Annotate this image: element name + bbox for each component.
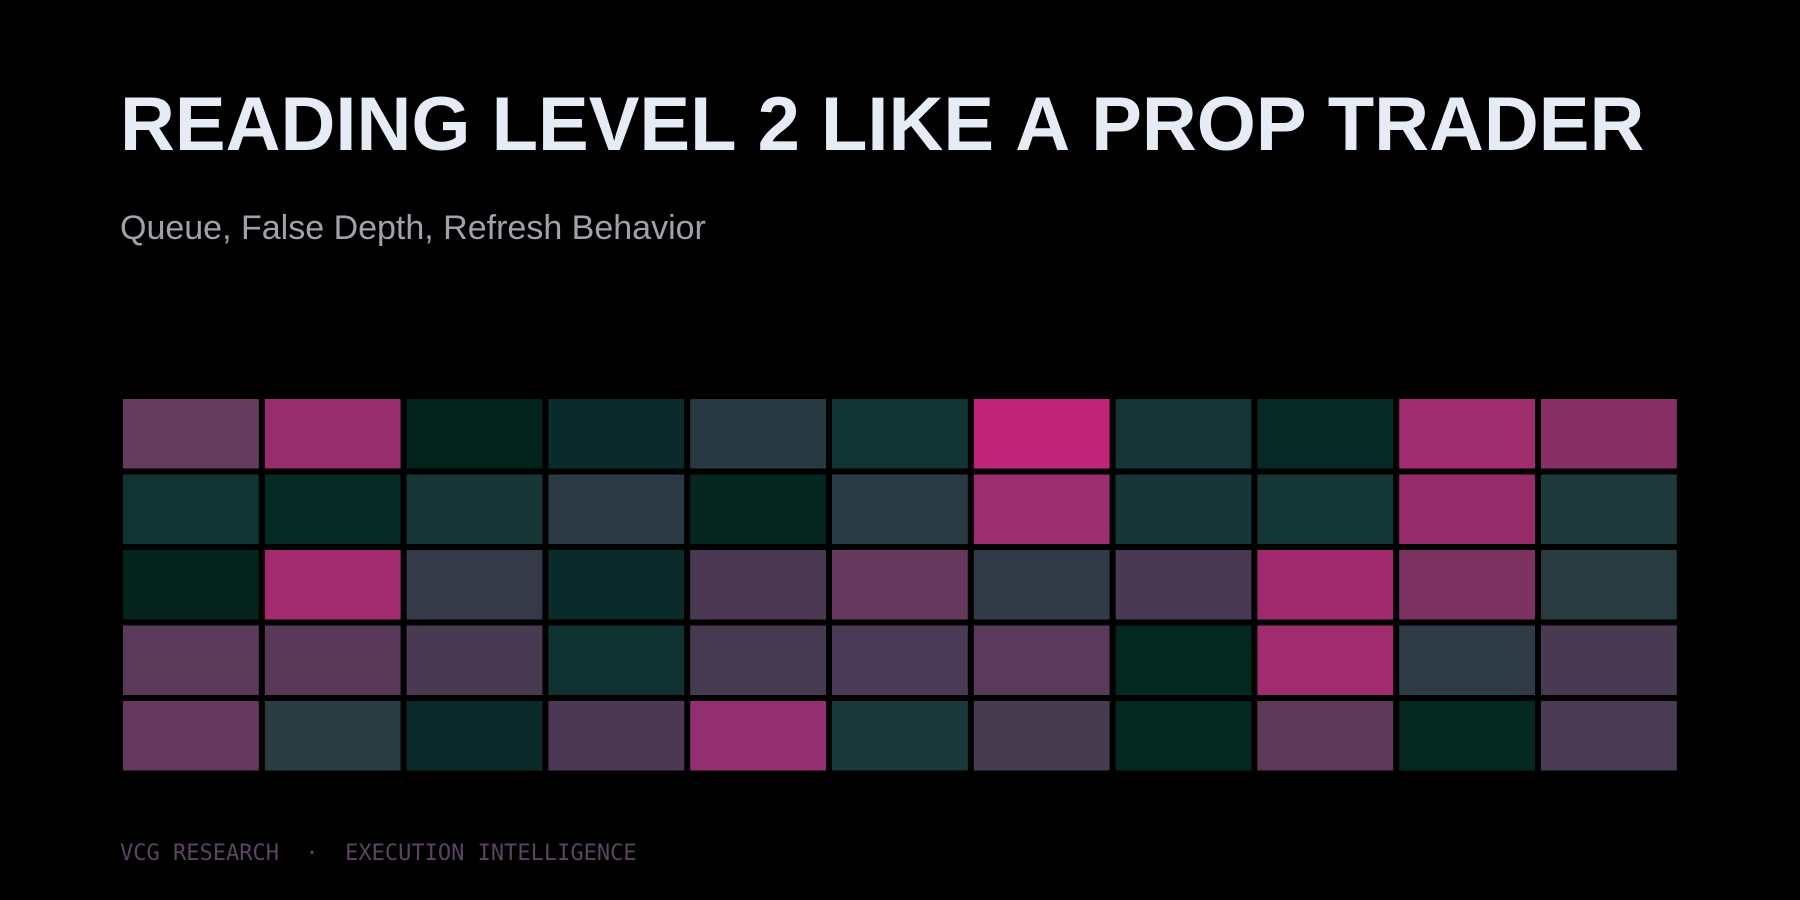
footer: VCG RESEARCH · EXECUTION INTELLIGENCE	[120, 841, 637, 866]
title: READING LEVEL 2 LIKE A PROP TRADER	[120, 82, 1644, 167]
subtitle: Queue, False Depth, Refresh Behavior	[120, 209, 706, 247]
